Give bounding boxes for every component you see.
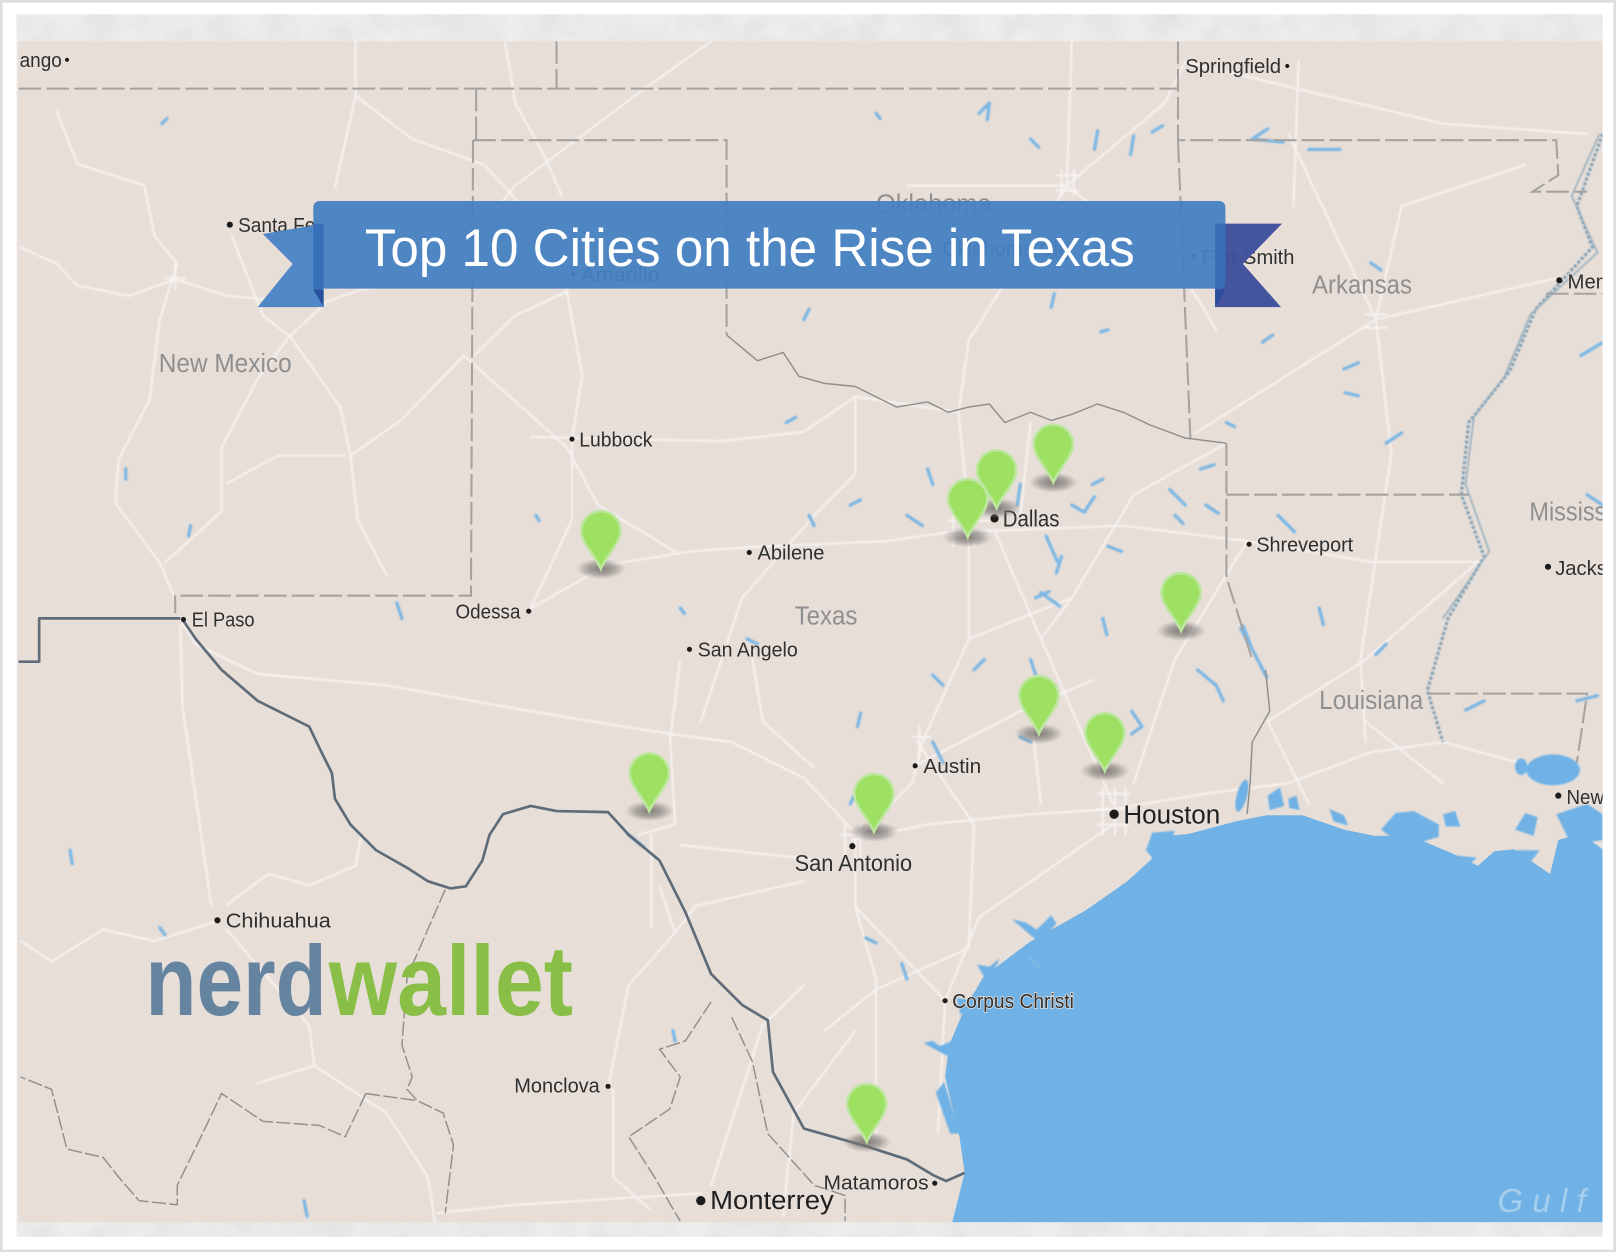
coastal marsh and bays: [923, 754, 1603, 1134]
pin: north-east of Dallas: [1029, 425, 1078, 493]
state labels: Texas: [795, 603, 857, 631]
pin: Del Rio area: [625, 753, 674, 821]
city labels: Corpus Christi: [952, 990, 1074, 1013]
city labels: Amarillo: [581, 263, 660, 286]
city labels: Fort Smith: [1202, 246, 1294, 269]
ribbon folds: [313, 224, 1225, 307]
pin: west of Dallas: [943, 479, 992, 547]
state labels: Louisiana: [1319, 687, 1424, 715]
city labels: Chihuahua: [226, 910, 331, 933]
city labels: San Antonio: [795, 850, 912, 876]
city labels: Springfield: [1185, 55, 1281, 78]
pin: north of Dallas: [972, 450, 1021, 518]
city labels: El Paso: [192, 609, 255, 632]
title: Top 10 Cities on the Rise in Texas: [365, 219, 1135, 278]
pin: Rio Grande valley: [842, 1084, 891, 1152]
city labels: San Angelo: [698, 639, 798, 662]
city labels: Gulf: [1497, 1182, 1595, 1219]
pin: east Texas: [1156, 573, 1206, 641]
gulf of Mexico water: [945, 815, 1603, 1222]
city labels: Monclova: [514, 1074, 600, 1097]
state labels: Oklahoma: [876, 190, 992, 218]
map pins: [576, 425, 1206, 1152]
nerdwallet logo: [145, 925, 573, 1036]
nerdwallet logo: nerd: [145, 925, 327, 1036]
city labels: Oklahoma City: [942, 238, 1075, 261]
ribbon left tail: [258, 224, 324, 307]
state labels: Arkansas: [1312, 272, 1412, 300]
city labels: Monterrey: [710, 1187, 834, 1215]
city labels: Houston: [1123, 801, 1220, 829]
city labels: Santa Fe: [238, 214, 315, 237]
city labels: Matamoros: [823, 1171, 929, 1194]
city labels: Lubbock: [579, 428, 653, 451]
city labels: Odessa: [456, 600, 521, 623]
city labels: Dallas: [1003, 506, 1059, 532]
nerdwallet logo: wallet: [328, 925, 573, 1036]
pin: north of Houston: [1080, 713, 1130, 781]
Rio Grande international border: [19, 618, 965, 1181]
city labels: ango: [20, 49, 62, 72]
pin: San Antonio area: [849, 774, 899, 842]
state labels: [159, 190, 1616, 715]
title ribbon banner: [258, 201, 1282, 307]
city labels: Abilene: [758, 542, 824, 565]
pin: Midland area: [576, 511, 626, 579]
city labels: Shreveport: [1256, 533, 1353, 556]
city labels: Austin: [923, 755, 981, 778]
pin: College Station area: [1014, 676, 1064, 744]
state labels: New Mexico: [159, 350, 292, 378]
ribbon main band: [313, 201, 1225, 289]
ribbon right tail: [1215, 224, 1282, 307]
